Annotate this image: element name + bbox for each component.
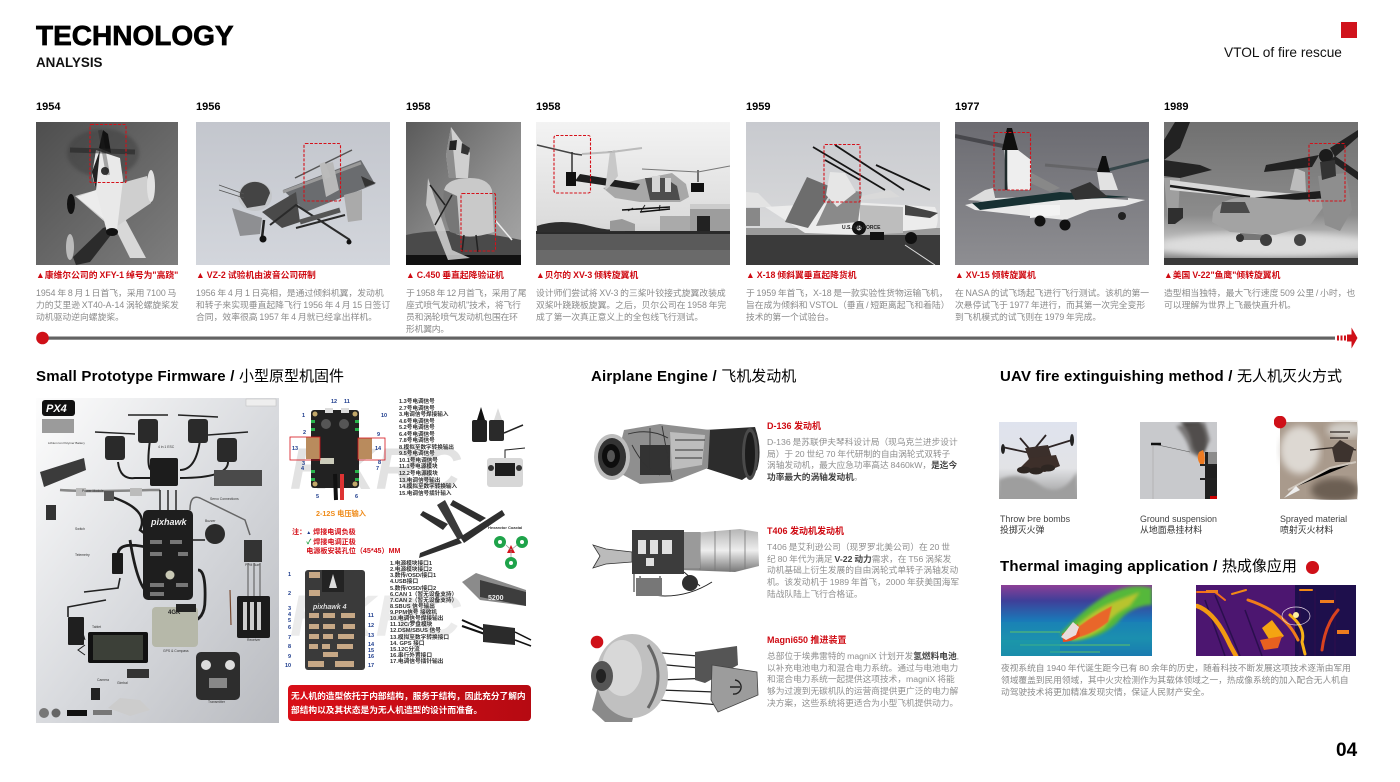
description: 设计师们尝试将 XV-3 的三桨叶铰接式旋翼改装成 <box>536 288 726 298</box>
power board diagram: 7 <box>376 466 379 472</box>
pixhawk 4 pinout: 10 <box>285 663 291 669</box>
hexarotor coaxial diagram: Hexarotor Coaxial <box>488 525 522 530</box>
thermal image: city night <box>1196 585 1356 656</box>
pixhawk 4 pinout <box>285 570 375 670</box>
description: 座式喷气发动机"技术，将飞行 <box>406 300 521 310</box>
engine description: 总部位于埃弗雷特的 magniX 计划开发氢燃料电池, <box>767 651 959 661</box>
description <box>536 288 726 322</box>
year: 1958 <box>406 101 430 113</box>
power board diagram: 14 <box>375 446 382 452</box>
pixhawk 4 pinout: 14 <box>368 642 375 648</box>
pixhawk number list: 2.电源模块接口2 <box>390 567 432 573</box>
pixhawk 4 pinout: 12 <box>368 623 374 629</box>
logos <box>39 708 49 718</box>
power module <box>104 491 114 501</box>
engine description: 涡轴发动机，最大应急功率高达 8460kW，是迄今 <box>767 460 957 470</box>
icon: red square <box>1341 22 1357 38</box>
photo: drone with bombs <box>999 422 1077 499</box>
pixhawk 4 pinout: 15 <box>368 648 374 654</box>
panel: PX4 pixhawk wiring poster: 4GK <box>168 610 181 616</box>
hexarotor coaxial diagram <box>488 525 528 569</box>
pixhawk number list: 15.12C分流 <box>390 647 420 653</box>
pixhawk number list: 10.电调信号焊接输出 <box>390 616 443 622</box>
caption: Ground suspension <box>1140 514 1217 524</box>
subtitle: ANALYSIS <box>36 55 102 70</box>
pixhawk 4 pinout: 7 <box>288 635 291 641</box>
power board diagram: 11 <box>344 399 350 405</box>
motors <box>105 419 237 462</box>
power board diagram: 2 <box>303 430 306 436</box>
engine title: D-136 发动机 <box>767 421 821 431</box>
year: 1977 <box>955 101 979 113</box>
poster labels: Power Module <box>82 489 104 493</box>
description: 形机翼内。 <box>406 324 449 334</box>
buzzer <box>205 524 225 544</box>
battery and ESC photos <box>462 573 532 647</box>
description <box>746 288 950 322</box>
pixhawk number list: 4.USB接口 <box>390 579 418 585</box>
power board diagram: 13 <box>292 446 298 452</box>
board number list: 10.1号电调信号 <box>399 458 438 464</box>
pixhawk 4 pinout: 4 <box>288 612 292 618</box>
poster labels: GPS & Compass <box>163 649 189 653</box>
pixhawk number list: 7.CAN 2（暂无设备支持） <box>390 598 457 604</box>
title: TECHNOLOGY <box>36 20 234 51</box>
poster labels: 4 in 1 ESC <box>158 445 175 449</box>
watermark: HKRC <box>290 437 462 502</box>
panel: throw fire bombs <box>999 422 1079 537</box>
pixhawk 4 pinout: 13 <box>368 633 374 639</box>
description: 于 1959 年首飞，X-18 是一款实验性货物运输飞机， <box>746 288 948 298</box>
poster labels: Telemetry <box>75 553 90 557</box>
pixhawk number list: 17.电调信号插针输出 <box>390 659 443 665</box>
power board diagram: 6 <box>355 494 358 500</box>
pixhawk number list: 14. GPS 接口 <box>390 641 424 647</box>
engine description: 够为过渡到无碳机队的运营商提供更广泛的电力解 <box>767 686 958 696</box>
panel: 1959 X-18 <box>746 101 950 322</box>
thermal image: smoke plume <box>1001 585 1152 656</box>
propeller <box>419 500 505 558</box>
year: 1989 <box>1164 101 1188 113</box>
board number list: 15.电调信号插针输入 <box>399 491 452 497</box>
board number list: 12.2号电源模块 <box>399 471 438 477</box>
photo: XFY-1 Pogo <box>36 122 178 265</box>
page number: 04 <box>1336 740 1357 761</box>
description: 力的艾里逊 XT40-A-14 涡轮螺旋桨发 <box>36 300 179 310</box>
callout: red note: 部结构以及其状态是为无人机造型的设计而准备。 <box>291 705 482 715</box>
caption: ▲ X-18 倾斜翼垂直起降货机 <box>746 270 857 280</box>
panel: PX4 pixhawk wiring poster: pixhawk <box>150 517 188 527</box>
caption: ▲ XV-15 倾转旋翼机 <box>955 270 1036 280</box>
description: 合同，效率很高 1957 年 4 月就已经拿出样机。 <box>196 312 377 322</box>
engine description: T406 是艾利逊公司（现罗罗北美公司）在 20 世 <box>767 542 950 552</box>
power board diagram: 4 <box>301 466 305 472</box>
power board diagram: 12 <box>331 399 337 405</box>
pixhawk number list: 8.SBUS 信号输出 <box>390 604 435 610</box>
poster labels: Gimbal <box>117 681 128 685</box>
engine title: Magni650 推进装置 <box>767 635 847 645</box>
servo rail <box>214 470 262 486</box>
caption: ▲康维尔公司的 XFY-1 绰号为"高跷" <box>36 270 178 280</box>
description: 成了第一次真正意义上的全包线飞行测试。 <box>536 312 703 322</box>
poster labels <box>48 441 261 704</box>
tablet <box>88 632 148 663</box>
poster labels: Switch <box>75 527 85 531</box>
photo: tethered drone at flare stack <box>1140 422 1217 499</box>
pixhawk 4 pinout: 9 <box>288 654 291 660</box>
engine description: 陆战队陆上飞行合格证。 <box>767 589 863 599</box>
board number list: 8.模拟至数字转换输出 <box>399 445 454 451</box>
description: 可以理解为世界上飞最快直升机。 <box>1164 300 1296 310</box>
panel: 1989 V-22 <box>1164 101 1358 310</box>
callout: red note: 无人机的造型依托于内部结构，服务于结构，因此充分了解内 <box>291 691 526 701</box>
poster labels: Receiver <box>247 638 261 642</box>
pixhawk 4 pinout: pixhawk 4 <box>312 604 347 611</box>
panel: PX4 pixhawk wiring poster: PX4 <box>46 403 67 415</box>
panel: T406 engine <box>592 526 959 599</box>
panel: 1958 XV-3 <box>536 101 730 322</box>
heading: Airplane Engine: Airplane Engine / 飞机发动机 <box>591 368 796 385</box>
thermal imaging description: 动驾驶技术将更加精准发现灾情，保证人民财产安全。 <box>1001 687 1210 697</box>
caption: 投掷灭火弹 <box>1000 525 1044 535</box>
panel: D-136 engine <box>594 421 958 484</box>
receiver <box>244 540 262 562</box>
callout: red note <box>288 685 531 721</box>
transmitter <box>196 652 240 700</box>
power board diagram: 5 <box>316 494 319 500</box>
image: D-136 engine <box>594 424 760 484</box>
battery and ESC photos: 5200 <box>488 595 504 602</box>
engine description: D-136 是苏联伊夫琴科设计局（现乌克兰进步设计 <box>767 437 958 447</box>
wires <box>60 440 260 655</box>
heading: Thermal imaging application: Thermal imaging application / 热成像应用 <box>1000 558 1297 575</box>
description: 技术的第一个试验台。 <box>746 312 834 322</box>
photo: X-18 <box>746 122 940 265</box>
board number list: 14.模拟至数字转换输入 <box>399 484 457 490</box>
engine description: 局）于 20 世纪 70 年代研制的自由涡轮式双转子 <box>767 449 950 459</box>
poster labels: Lithium Ion Polymer Battery <box>48 441 85 445</box>
pixhawk 4 pinout: 3 <box>288 606 291 612</box>
year: 1958 <box>536 101 560 113</box>
description <box>955 288 1149 322</box>
engine description: 动机基础上衍生发展的自由涡轮式单转子涡轴发动 <box>767 565 958 575</box>
logo PX4 <box>42 400 75 416</box>
engine description: 和混合电力系统一起提供这项技术，magniX 将能 <box>767 674 955 684</box>
page topic label: VTOL of fire rescue <box>1224 45 1342 60</box>
power board diagram <box>290 399 387 500</box>
photo: V-22 Osprey <box>1164 122 1358 265</box>
description: 旨在成为倾斜和 VSTOL（垂直 / 短距离起飞和着陆） <box>746 300 950 310</box>
poster labels: Camera <box>97 678 109 682</box>
board number list: 4.6号电调信号 <box>399 419 435 425</box>
description <box>406 288 526 334</box>
engine description: 决方案，这些系统将更适合为小型飞机提供动力。 <box>767 698 958 708</box>
image: Magni650 motor <box>590 632 762 722</box>
board number list: 2.7号电调信号 <box>399 406 435 412</box>
photo: XV-15 <box>955 122 1149 265</box>
pixhawk number list: 1.电源模块接口1 <box>390 561 432 567</box>
voltage label: 2-12S 电压输入 <box>316 509 366 518</box>
description: 造型相当独特，最大飞行速度 509 公里 / 小时，也 <box>1164 288 1355 298</box>
battery <box>40 458 86 487</box>
poster labels: Tablet <box>92 625 101 629</box>
description: 员和涡轮喷气发动机包围在环 <box>406 312 518 322</box>
ESC <box>150 458 178 486</box>
pixhawk number list: 12.DSM/SBUS 信号 <box>390 628 441 634</box>
poster labels: Buzzer <box>205 519 216 523</box>
thermal imaging description: 夜视系统自 1940 年代诞生距今已有 80 余年的历史，随着科技不断发展这项技术逐渐由军用 <box>1001 663 1351 673</box>
poster labels: Servo Connections <box>210 497 239 501</box>
power board diagram: 10 <box>381 413 387 419</box>
thermal imaging description <box>1001 663 1351 699</box>
board number list: 9.5号电调信号 <box>399 451 435 457</box>
caption: Throw Þre bombs <box>1000 514 1070 524</box>
pixhawk number list: 9.PPM信号 接收机 <box>390 610 437 616</box>
description: 于 1958 年 12 月首飞，采用了尾 <box>406 288 526 298</box>
photo: VZ-2 <box>196 122 390 265</box>
caption: ▲ VZ-2 试验机由波音公司研制 <box>196 270 316 280</box>
panel: PX4 pixhawk wiring poster <box>36 398 279 723</box>
pixhawk 4 pinout: 16 <box>368 654 374 660</box>
year: 1954 <box>36 101 60 113</box>
thermal imaging description: 领域覆盖到民用领域，其中火灾检测作为其载体领域之一，热成像系统的加入配合无人机自 <box>1001 675 1348 685</box>
caption <box>1280 514 1347 536</box>
photo: C.450 <box>406 122 521 265</box>
description <box>196 288 390 322</box>
pixhawk 4 pinout: 11 <box>368 613 374 619</box>
year: 1959 <box>746 101 770 113</box>
caption: 喷射灭火材料 <box>1280 525 1333 535</box>
engine description: 机。该发动机于 1989 年首飞，2000 年获美国海军 <box>767 577 959 587</box>
board number list: 13.电调信号输出 <box>399 478 440 484</box>
soldering note <box>292 528 400 554</box>
engine description <box>767 651 959 710</box>
pixhawk number list: 13.模拟至数字转换接口 <box>390 634 449 640</box>
panel: sprayed material <box>1274 416 1358 537</box>
panel: Magni650 propulsion <box>590 632 970 722</box>
panel: flight controller parts <box>285 398 532 721</box>
caption <box>1000 514 1070 536</box>
caption: ▲贝尔的 XV-3 倾转旋翼机 <box>536 270 638 280</box>
soldering note: 注：▲ 焊接电调负极 <box>292 528 356 536</box>
board number list <box>399 398 457 497</box>
pixhawk number list: 16.串行外置接口 <box>390 653 432 659</box>
watermark lower: HKRC <box>290 584 462 649</box>
heading: UAV fire extinguishing method: UAV fire extinguishing method / 无人机灭火方式 <box>1000 368 1342 385</box>
engine description: 纪 80 年代为满足 V-22 动力需求，在 T56 涡桨发 <box>767 554 951 564</box>
photo: drone spraying <box>1274 416 1358 500</box>
caption: Sprayed material <box>1280 514 1347 524</box>
panel: 1958 C.450 <box>406 101 526 334</box>
image: T406 engine <box>590 524 762 604</box>
pixhawk 4 pinout: 2 <box>288 591 291 597</box>
photo: XV-3 <box>536 122 730 265</box>
caption: 从地面悬挂材料 <box>1140 525 1202 535</box>
pixhawk 4 pinout: 6 <box>288 625 291 631</box>
poster labels: PPM Sum <box>245 563 260 567</box>
gimbal and camera <box>108 698 150 716</box>
heading: Small Prototype Firmware: Small Prototype Firmware / 小型原型机固件 <box>36 368 344 385</box>
year: 1956 <box>196 101 220 113</box>
description: 到飞机模式的试飞则在 1979 年完成。 <box>955 312 1101 322</box>
description <box>36 288 179 322</box>
power board diagram: 3 <box>302 461 305 467</box>
board number list: 7.8号电调信号 <box>399 438 435 444</box>
description: 次悬停试飞于 1977 年进行，而其第一次完全变形 <box>955 300 1145 310</box>
power board diagram: 9 <box>377 432 380 438</box>
pixhawk number list: 5.数传/OSD/接口2 <box>390 586 436 592</box>
engine title: T406 发动机发动机 <box>767 526 844 536</box>
board number list: 1.3号电调信号 <box>399 399 435 405</box>
description: 在 NASA 的试飞场起飞进行飞行测试。该机的第一 <box>955 288 1149 298</box>
panel: 1954 XFY-1 <box>36 101 179 322</box>
engine description: 功率最大的涡轴发动机。 <box>767 472 863 482</box>
timeline arrow <box>36 328 1358 348</box>
pixhawk number list: 3.数传/OSD/接口1 <box>390 573 436 579</box>
description: 动机驱动逆向螺旋桨。 <box>36 312 124 322</box>
engine description <box>767 437 958 482</box>
pixhawk 4 pinout: 5 <box>288 618 291 624</box>
description: 双桨叶跷跷板旋翼。之后，贝尔公司在 1958 年完 <box>536 300 726 310</box>
board number list: 11.1号电源模块 <box>399 464 438 470</box>
board number list: 6.4号电调信号 <box>399 432 435 438</box>
description: 1956 年 4 月 1 日亮相，是通过倾斜机翼，发动机 <box>196 288 384 298</box>
panel: 1956 VZ-2 <box>196 101 390 322</box>
caption <box>1140 514 1217 536</box>
pixhawk number list: 11.12C/罗盘模块 <box>390 622 432 628</box>
pixhawk number list <box>390 560 457 665</box>
caption: ▲美国 V-22"鱼鹰"倾转旋翼机 <box>1164 270 1280 280</box>
pixhawk 4 pinout: 17 <box>368 663 374 669</box>
pixhawk 4 pinout: 8 <box>288 644 291 650</box>
photo: X-18: U.S. AIR FORCE <box>842 225 881 231</box>
board number list: 5.2号电调信号 <box>399 425 435 431</box>
description: 和转子来实现垂直起降飞行 1956 年 4 月 15 日签订 <box>196 300 390 310</box>
power board diagram: 8 <box>378 460 381 466</box>
panel: ground suspension <box>1140 422 1220 537</box>
GPS <box>152 607 198 647</box>
caption: ▲ C.450 垂直起降验证机 <box>406 270 504 280</box>
engine description: 以补充电池电力和混合电力系统。通过与电池电力 <box>767 663 958 673</box>
description: 1954 年 8 月 1 日首飞，采用 7100 马 <box>36 288 176 298</box>
description <box>1164 288 1355 310</box>
icon: red dot <box>1306 561 1318 574</box>
board number list: 3.电调信号焊接输入 <box>399 412 448 418</box>
motors photo <box>472 407 525 487</box>
power board diagram: 1 <box>302 413 305 419</box>
pixhawk number list: 6.CAN 1（暂无设备支持） <box>390 592 457 598</box>
panel: 1977 XV-15 <box>955 101 1149 322</box>
pixhawk 4 pinout: 1 <box>288 572 291 578</box>
telemetry <box>112 553 123 574</box>
pixhawk <box>143 510 193 600</box>
poster labels: Transmitter <box>208 700 226 704</box>
engine description <box>767 542 959 601</box>
